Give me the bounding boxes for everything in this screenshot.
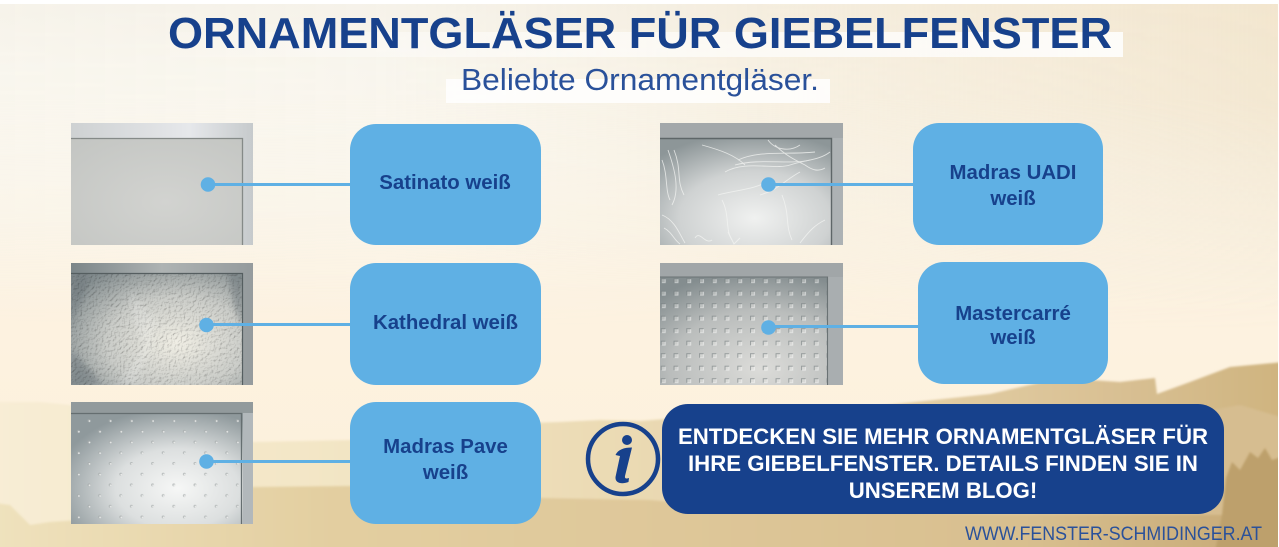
label text: weiß — [422, 462, 468, 484]
callout: IHRE GIEBELFENSTER. DETAILS FINDEN SIE IN — [688, 451, 1198, 476]
connector line — [206, 323, 351, 326]
glass sample: Madras Pave — [71, 402, 253, 524]
subtitle: Beliebte Ornamentgläser. — [461, 63, 819, 97]
callout: ENTDECKEN SIE MEHR ORNAMENTGLÄSER FÜR — [678, 424, 1208, 449]
connector line — [768, 183, 913, 186]
marker dot — [199, 454, 214, 469]
glass sample: Satinato — [71, 123, 253, 245]
marker dot — [199, 318, 214, 332]
label box — [918, 262, 1108, 384]
callout — [662, 404, 1224, 514]
label box — [350, 402, 541, 524]
label box — [913, 123, 1103, 245]
marker dot — [761, 177, 776, 192]
panel: Satinato weiß — [71, 123, 541, 245]
label text: Mastercarré — [955, 303, 1071, 325]
label text: weiß — [989, 327, 1036, 349]
glass sample: Madras UADI — [660, 123, 843, 245]
glass sample: Mastercarré — [660, 263, 843, 385]
marker dot — [761, 320, 776, 335]
connector line — [768, 325, 918, 328]
connector line — [207, 460, 351, 463]
connector line — [208, 183, 351, 186]
title: ORNAMENTGLÄSER FÜR GIEBELFENSTER — [168, 9, 1112, 58]
title white highlight bands — [170, 32, 1123, 103]
glass sample: Kathedral — [71, 263, 253, 385]
panel: Mastercarré weiß — [660, 262, 1108, 385]
panel: Kathedral weiß — [71, 263, 541, 385]
panel: Madras UADI weiß — [660, 123, 1103, 245]
callout: UNSEREM BLOG! — [849, 478, 1037, 503]
label text: weiß — [989, 188, 1036, 210]
icon: information — [588, 424, 658, 494]
label box — [350, 263, 541, 385]
panel: Madras Pave weiß — [71, 402, 541, 524]
marker dot — [201, 177, 215, 192]
label text: Madras Pave — [383, 436, 508, 458]
label text: Satinato weiß — [379, 172, 511, 194]
label text: Kathedral weiß — [373, 312, 518, 334]
website url: WWW.FENSTER-SCHMIDINGER.AT — [965, 524, 1262, 545]
label box — [350, 124, 541, 245]
label text: Madras UADI — [950, 162, 1076, 184]
